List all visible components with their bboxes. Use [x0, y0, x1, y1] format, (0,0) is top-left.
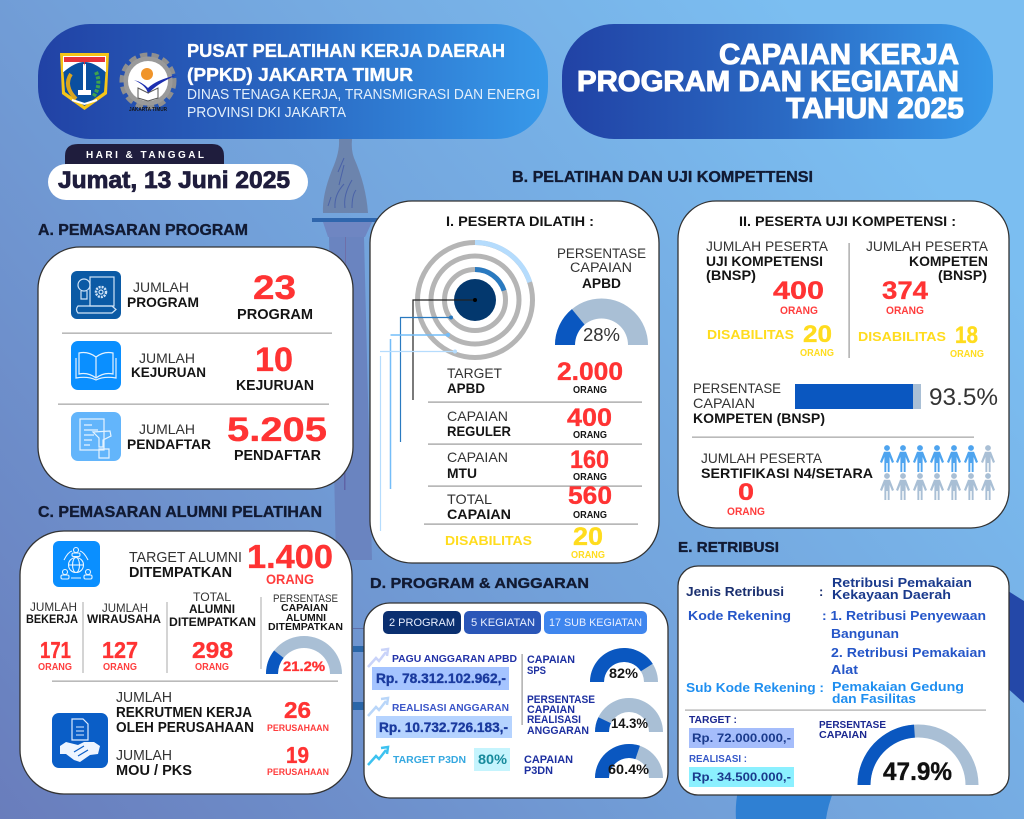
date badge: HARI & TANGGAL: [86, 150, 204, 161]
jumlah kejuruan: KEJURUAN: [131, 364, 206, 380]
progress bar: kompeten 93.5%: KOMPETEN (BNSP): [693, 410, 825, 426]
gauge: capaian alumni 21.2%: 21.2%: [283, 658, 326, 674]
icon: Jakarta crest: [60, 53, 109, 110]
gauge: SPS 82%: 82%: [609, 665, 639, 681]
jumlah kejuruan: [131, 341, 314, 394]
jumlah pendaftar: PENDAFTAR: [127, 436, 211, 452]
pills: [383, 611, 647, 634]
gauge: realisasi 14.3%: [527, 694, 663, 737]
gauge: P3DN 60.4%: 60.4%: [608, 761, 650, 777]
rekrutmen kerja: REKRUTMEN KERJA: [116, 705, 252, 721]
progress bar: kompeten 93.5%: PERSENTASE: [693, 380, 781, 396]
jumlah bekerja: ORANG: [38, 662, 72, 673]
gauge: realisasi 14.3%: REALISASI: [527, 714, 581, 726]
total capaian row: ORANG: [573, 510, 607, 521]
total alumni ditempatkan: 298: [192, 637, 233, 663]
gauge: realisasi 14.3%: PERSENTASE: [527, 694, 595, 706]
total alumni ditempatkan: [169, 590, 256, 673]
jumlah peserta uji kompetensi: DISABILITAS: [707, 327, 794, 342]
gauge: APBD 28%: APBD: [582, 276, 621, 291]
jumlah peserta uji kompetensi: ORANG: [780, 305, 818, 317]
mou pks: MOU / PKS: [116, 763, 192, 779]
jenis retribusi: Retribusi Pemakaian: [832, 575, 972, 590]
jumlah peserta uji kompetensi: 20: [803, 321, 832, 348]
target APBD row: ORANG: [573, 385, 607, 396]
target APBD row: TARGET: [447, 365, 502, 381]
total capaian row: 560: [568, 482, 612, 510]
jenis retribusi: Kekayaan Daerah: [832, 587, 951, 602]
total alumni ditempatkan: ALUMNI: [189, 602, 235, 616]
gauge: capaian alumni 21.2%: CAPAIAN: [281, 602, 328, 614]
kode rekening: Bangunan: [831, 626, 899, 641]
icon: open book: [71, 341, 121, 390]
gauge: capaian alumni 21.2%: DITEMPATKAN: [268, 621, 343, 633]
kode rekening: Kode Rekening: [688, 608, 791, 623]
header text: PUSAT PELATIHAN KERJA DAERAH: [187, 41, 505, 61]
pictogram: people: [880, 445, 995, 500]
jumlah wirausaha: WIRAUSAHA: [87, 612, 161, 626]
rekrutmen kerja: [116, 690, 329, 736]
header text: PROVINSI DKI JAKARTA: [187, 104, 346, 121]
jumlah bekerja: JUMLAH: [30, 600, 77, 614]
gauge: APBD 28%: [555, 246, 648, 345]
icon: PPKD gear logo: [123, 56, 177, 113]
heading B: B. PELATIHAN DAN UJI KOMPETTENSI: [512, 169, 813, 186]
gauge: capaian alumni 21.2%: [266, 593, 343, 674]
pagu anggaran: Rp. 78.312.102.962,-: [376, 670, 506, 686]
icon: globe network: [53, 541, 100, 587]
panel C: pemasaran alumni: [20, 531, 352, 794]
panel B-II: peserta uji kompetensi: [678, 201, 1009, 528]
panel D: program dan anggaran: [364, 603, 668, 798]
jumlah pendaftar: PENDAFTAR: [234, 447, 321, 464]
jenis retribusi: Jenis Retribusi: [686, 584, 784, 599]
capaian MTU row: CAPAIAN: [447, 449, 508, 465]
jumlah pendaftar: [127, 411, 327, 464]
gauge: retribusi 47.9%: [819, 720, 978, 786]
capaian reguler row: [447, 404, 612, 441]
jumlah bekerja: [26, 600, 78, 673]
jumlah peserta uji kompetensi: [706, 238, 834, 359]
gauge: SPS 82%: [527, 648, 658, 682]
target APBD row: 2.000: [557, 358, 623, 386]
capaian MTU row: [447, 446, 609, 483]
jumlah peserta kompeten: ORANG: [886, 305, 924, 317]
gauge: APBD 28%: CAPAIAN: [570, 260, 632, 275]
disabilitas row: ORANG: [571, 550, 605, 561]
disabilitas row: DISABILITAS: [445, 533, 532, 548]
target alumni: DITEMPATKAN: [129, 564, 232, 581]
progress bar: kompeten 93.5%: 93.5%: [929, 384, 998, 411]
heading D: D. PROGRAM & ANGGARAN: [370, 575, 589, 592]
jumlah peserta kompeten: JUMLAH PESERTA: [866, 238, 989, 254]
jumlah program: 23: [253, 269, 296, 307]
sub kode rekening: [686, 679, 964, 706]
jumlah peserta uji kompetensi: ORANG: [800, 348, 834, 359]
sertifikasi N4: 0: [738, 479, 754, 506]
date badge: Jumat, 13 Juni 2025: [58, 167, 290, 194]
realisasi anggaran: Rp. 10.732.726.183,-: [379, 719, 508, 735]
jumlah wirausaha: ORANG: [103, 662, 137, 673]
rekrutmen kerja: PERUSAHAAN: [267, 723, 329, 734]
panel E: retribusi: [678, 566, 1009, 795]
capaian MTU row: 160: [570, 446, 609, 474]
realisasi anggaran: REALISASI ANGGARAN: [392, 702, 509, 714]
jumlah wirausaha: 127: [102, 637, 138, 663]
gauge: P3DN 60.4%: [524, 744, 663, 778]
target P3DN: [368, 747, 510, 771]
background swooshes: [736, 589, 1024, 819]
sub kode rekening: dan Fasilitas: [832, 691, 916, 706]
target: Rp. 72.000.000,-: [692, 733, 791, 745]
jumlah peserta kompeten: 18: [955, 322, 978, 349]
mou pks: PERUSAHAAN: [267, 767, 329, 778]
header banner: title: CAPAIAN KERJA: [719, 39, 959, 71]
panel B-I: peserta dilatih: I. PESERTA DILATIH :: [446, 213, 594, 229]
gauge: retribusi 47.9%: CAPAIAN: [819, 730, 867, 741]
jumlah program: PROGRAM: [127, 294, 199, 310]
background monument: [312, 139, 380, 710]
jumlah peserta kompeten: (BNSP): [938, 267, 987, 283]
icon: handshake and document: [52, 713, 108, 768]
panel B-I: peserta dilatih: [370, 201, 659, 563]
capaian reguler row: REGULER: [447, 423, 511, 439]
jumlah peserta kompeten: DISABILITAS: [858, 329, 946, 344]
date badge: [48, 144, 308, 200]
kode rekening: Alat: [831, 662, 859, 677]
mou pks: 19: [286, 742, 309, 768]
realisasi: [689, 754, 794, 787]
gauge: retribusi 47.9%: 47.9%: [883, 758, 952, 786]
jumlah peserta kompeten: ORANG: [950, 349, 984, 360]
jumlah pendaftar: 5.205: [227, 411, 327, 449]
heading A: A. PEMASARAN PROGRAM: [38, 222, 248, 239]
kode rekening: : 1. Retribusi Penyewaan: [822, 608, 986, 623]
jumlah program: PROGRAM: [237, 306, 313, 323]
jumlah wirausaha: JUMLAH: [102, 601, 148, 615]
disabilitas row: 20: [573, 523, 603, 551]
sub kode rekening: Sub Kode Rekening :: [686, 680, 824, 695]
header banner: title: [562, 24, 993, 139]
gauge: APBD 28%: PERSENTASE: [557, 246, 646, 261]
jumlah bekerja: 171: [40, 637, 71, 663]
jumlah program: [127, 269, 313, 323]
total capaian row: [447, 482, 612, 522]
jumlah program: JUMLAH: [133, 279, 189, 295]
mou pks: JUMLAH: [116, 748, 172, 764]
capaian reguler row: ORANG: [573, 430, 607, 441]
pagu anggaran: [368, 649, 517, 690]
panel B-II: peserta uji kompetensi: II. PESERTA UJI KOMPETENSI :: [739, 213, 956, 229]
total alumni ditempatkan: TOTAL: [193, 590, 231, 604]
sertifikasi N4: SERTIFIKASI N4/SETARA: [701, 465, 873, 481]
capaian MTU row: MTU: [447, 465, 477, 481]
target APBD row: [447, 358, 623, 396]
total alumni ditempatkan: ORANG: [195, 662, 229, 673]
heading E: E. RETRIBUSI: [678, 539, 779, 556]
header banner: title: TAHUN 2025: [786, 93, 964, 125]
icon: registration form: [71, 412, 121, 461]
jumlah peserta kompeten: 374: [882, 277, 928, 305]
gauge: realisasi 14.3%: 14.3%: [611, 715, 649, 731]
realisasi: Rp. 34.500.000,-: [692, 772, 791, 784]
kode rekening: 2. Retribusi Pemakaian: [831, 645, 986, 660]
pills: 2 PROGRAM: [389, 617, 455, 629]
heading C: C. PEMASARAN ALUMNI PELATIHAN: [38, 504, 322, 521]
header banner: title: PROGRAM DAN KEGIATAN: [577, 66, 959, 98]
capaian reguler row: 400: [567, 404, 612, 432]
jumlah peserta uji kompetensi: UJI KOMPETENSI: [706, 253, 823, 269]
target alumni: TARGET ALUMNI: [129, 549, 242, 566]
target P3DN: TARGET P3DN: [393, 754, 466, 766]
jumlah pendaftar: JUMLAH: [139, 421, 195, 437]
gauge: P3DN 60.4%: P3DN: [524, 765, 553, 777]
rekrutmen kerja: OLEH PERUSAHAAN: [116, 720, 254, 736]
pills: 17 SUB KEGIATAN: [549, 617, 642, 629]
jumlah peserta uji kompetensi: (BNSP): [706, 267, 756, 283]
pagu anggaran: PAGU ANGGARAN APBD: [392, 653, 517, 665]
target alumni: ORANG: [266, 571, 314, 587]
radial ring chart: [380, 242, 532, 531]
target P3DN: 80%: [478, 751, 508, 767]
target: TARGET :: [689, 715, 737, 726]
header banner: PPKD: [38, 24, 548, 139]
realisasi anggaran: [368, 698, 512, 738]
jumlah kejuruan: KEJURUAN: [236, 377, 314, 394]
pills: 5 KEGIATAN: [471, 617, 535, 629]
progress bar: kompeten 93.5%: CAPAIAN: [693, 395, 755, 411]
jenis retribusi: :: [819, 584, 823, 599]
sertifikasi N4: JUMLAH PESERTA: [701, 450, 823, 466]
capaian reguler row: CAPAIAN: [447, 408, 508, 424]
gauge: SPS 82%: SPS: [527, 665, 546, 677]
header text: (PPKD) JAKARTA TIMUR: [187, 65, 413, 85]
jumlah kejuruan: JUMLAH: [139, 350, 195, 366]
gauge: realisasi 14.3%: ANGGARAN: [527, 725, 589, 737]
jumlah bekerja: BEKERJA: [26, 612, 78, 626]
target APBD row: APBD: [447, 380, 485, 396]
panel A: pemasaran program: [38, 247, 353, 489]
sertifikasi N4: ORANG: [727, 506, 765, 518]
jumlah peserta uji kompetensi: 400: [773, 277, 824, 305]
gauge: SPS 82%: CAPAIAN: [527, 654, 575, 666]
target: [689, 715, 794, 748]
gauge: retribusi 47.9%: PERSENTASE: [819, 720, 886, 731]
rekrutmen kerja: 26: [284, 697, 311, 723]
progress bar: kompeten 93.5%: [693, 380, 998, 426]
gauge: P3DN 60.4%: CAPAIAN: [524, 754, 573, 766]
realisasi: REALISASI :: [689, 754, 747, 765]
header text: [187, 41, 540, 121]
gauge: capaian alumni 21.2%: PERSENTASE: [273, 593, 338, 605]
mou pks: [116, 742, 329, 779]
sertifikasi N4: [701, 450, 873, 518]
total alumni ditempatkan: DITEMPATKAN: [169, 615, 256, 629]
kode rekening: [688, 608, 986, 677]
jumlah peserta kompeten: KOMPETEN: [909, 253, 988, 269]
header text: DINAS TENAGA KERJA, TRANSMIGRASI DAN ENERGI: [187, 86, 540, 103]
icon: PPKD gear logo: JAKARTA TIMUR: [129, 107, 167, 113]
capaian MTU row: ORANG: [573, 472, 607, 483]
target alumni: 1.400: [247, 538, 333, 575]
total capaian row: TOTAL: [447, 491, 492, 507]
jenis retribusi: [686, 575, 972, 602]
gauge: realisasi 14.3%: CAPAIAN: [527, 704, 575, 716]
disabilitas row: [445, 523, 605, 561]
target alumni: [129, 538, 333, 587]
jumlah wirausaha: [87, 601, 161, 673]
jumlah peserta kompeten: [858, 238, 989, 360]
total capaian row: CAPAIAN: [447, 506, 511, 522]
gauge: APBD 28%: 28%: [583, 325, 620, 345]
rekrutmen kerja: JUMLAH: [116, 690, 172, 706]
icon: program: [71, 271, 121, 319]
jumlah peserta uji kompetensi: JUMLAH PESERTA: [706, 238, 829, 254]
jumlah kejuruan: 10: [255, 341, 293, 379]
gauge: capaian alumni 21.2%: ALUMNI: [286, 612, 326, 624]
sub kode rekening: Pemakaian Gedung: [832, 679, 964, 694]
